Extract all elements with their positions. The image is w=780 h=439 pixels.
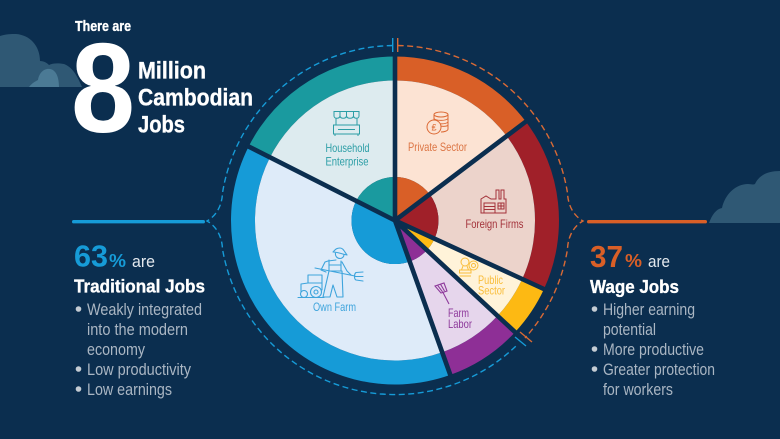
bullet list: traditional jobs: Low productivity [87,360,191,379]
label: own farm: Own Farm [313,300,356,314]
stat: 63 percent [74,238,155,274]
icon: factory [481,190,506,213]
subheading: wage jobs: Wage Jobs [590,277,679,297]
stat: 37 percent: are [648,252,670,271]
segment: own farm [231,147,450,385]
title: 8 [71,17,135,159]
label: household enterprise: Household [326,141,370,155]
icon: coins [427,112,448,134]
text block: traditional jobs [74,238,205,399]
label: household enterprise: Enterprise [326,154,369,168]
icon: market stall [334,112,360,136]
icon: pitchfork [435,283,449,304]
stat: 37 percent [590,239,670,274]
icon: stamp [460,258,478,276]
bullet list: traditional jobs: economy [87,340,145,359]
blue dashed bracket: traditional jobs [207,38,526,395]
bullet list: wage jobs: for workers [603,380,673,399]
stat: 37 percent: % [625,251,642,271]
bullet list: wage jobs: More productive [603,340,704,359]
label: public sector [478,273,505,298]
segment: private sector [395,56,526,220]
stat: 37 percent: 37 [590,239,623,274]
title: Cambodian [138,84,253,112]
icon: farmer and tractor [298,248,363,298]
subheading: traditional jobs: Traditional Jobs [74,276,205,296]
left cloud [0,34,82,87]
label: foreign firms: Foreign Firms [466,217,524,231]
bullet list: wage jobs: Greater protection [603,360,715,379]
text block: wage jobs [590,239,715,399]
bullet list: traditional jobs: into the modern [87,320,188,339]
title: Million [138,58,206,84]
pie chart [231,54,559,385]
right cloud [709,171,780,223]
bullet list: traditional jobs [76,300,202,399]
segment: public sector [395,220,544,332]
label: farm labor [448,306,472,331]
title: There are [75,19,131,35]
label: farm labor: Farm [448,306,469,320]
stat: 63 percent: % [109,251,126,271]
stat: 63 percent: are [132,252,155,271]
bullet list: traditional jobs: Weakly integrated [87,300,202,319]
orange dashed bracket: wage jobs [398,38,583,342]
label: farm labor: Labor [448,317,472,331]
bullet list: traditional jobs: Low earnings [87,380,172,399]
right rule [587,220,707,223]
icon: coins: ₤ [432,122,437,132]
segment: foreign firms [395,122,559,289]
left rule [72,220,205,223]
bullet list: wage jobs: potential [603,320,656,339]
segment: household enterprise [249,56,395,220]
title: Jobs [138,112,185,138]
stat: 63 percent: 63 [74,238,108,274]
label: private sector: Private Sector [408,140,467,154]
label: public sector: Sector [478,284,505,298]
label: public sector: Public [478,273,503,287]
bullet list: wage jobs: Higher earning [603,300,695,319]
bullet list: wage jobs [592,300,715,399]
segment: farm labor [395,220,515,375]
label: household enterprise [326,141,370,168]
title [71,17,253,159]
